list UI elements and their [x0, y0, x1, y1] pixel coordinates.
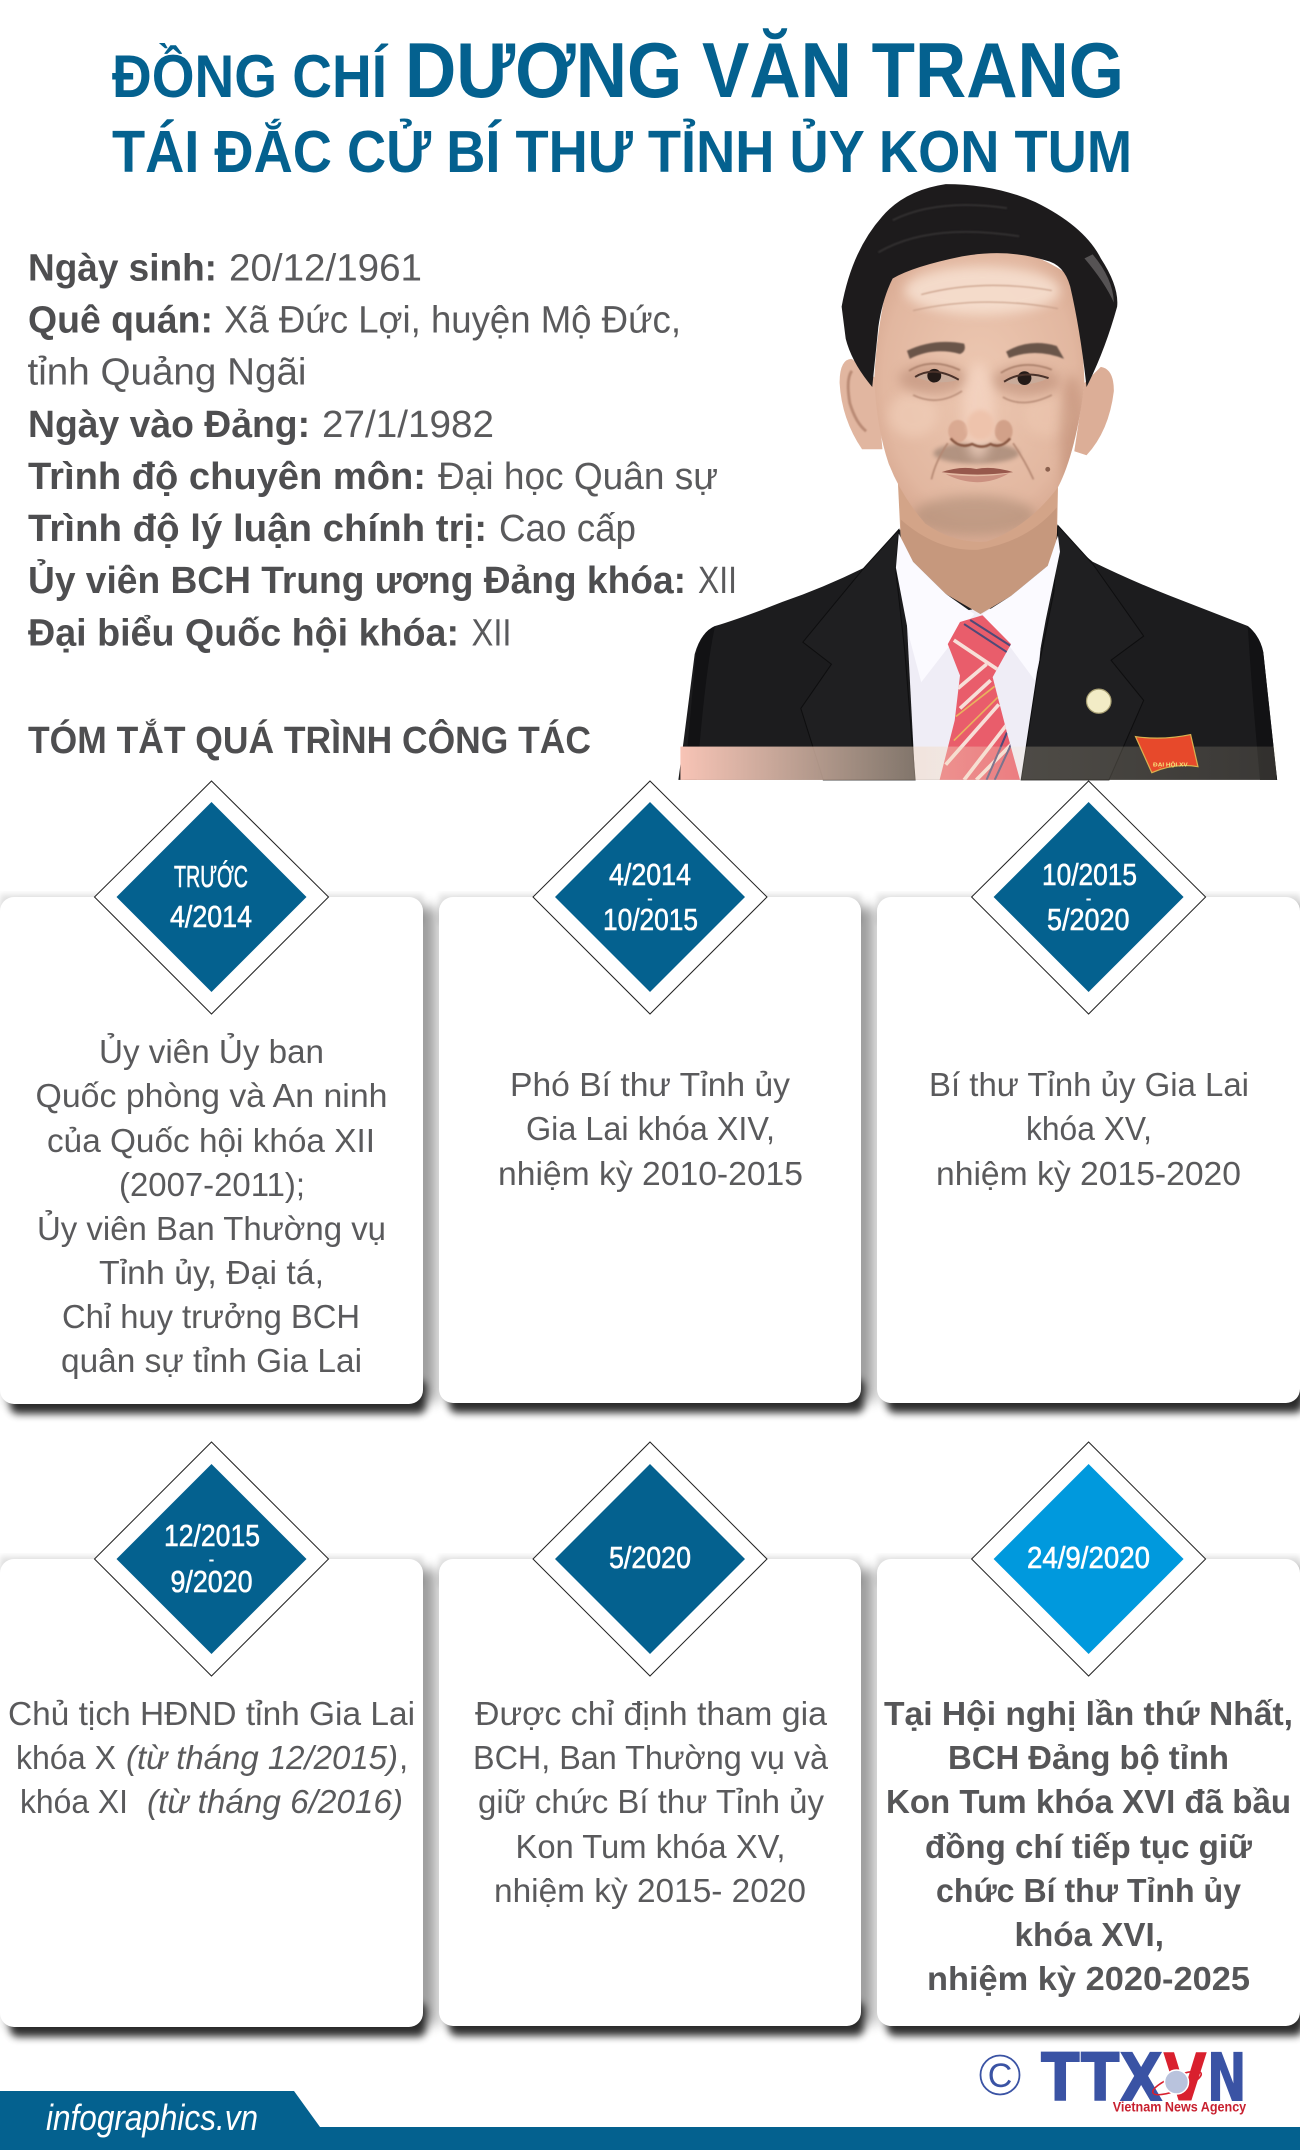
copyright mark [980, 2056, 1020, 2095]
panel: 10/2015 - 5/2020 [877, 781, 1300, 1413]
party join date: 27/1/1982 [322, 404, 494, 446]
party join date [28, 404, 494, 446]
red flag badge [1136, 735, 1198, 773]
description: Gia Lai khóa XIV, [526, 1110, 775, 1147]
nose [931, 410, 1033, 479]
date diamond [94, 781, 328, 1014]
description: nhiệm kỳ 2010-2015 [498, 1155, 803, 1192]
date diamond: 12/2015 [164, 1518, 260, 1553]
copyright mark: C [988, 2057, 1012, 2095]
political theory: Cao cấp [499, 508, 636, 550]
TTXVN wordmark: N [1207, 2040, 1246, 2116]
date diamond [972, 1442, 1206, 1676]
national assembly: XII [472, 612, 512, 654]
lapel pin [1087, 689, 1111, 713]
description: khóa XVI, [1014, 1916, 1164, 1953]
description: nhiệm kỳ 2015-2020 [936, 1155, 1241, 1192]
date diamond [94, 1442, 328, 1676]
description: Được chỉ định tham gia [475, 1695, 828, 1732]
description: BCH, Ban Thường vụ và [473, 1739, 829, 1776]
education: Trình độ chuyên môn: [28, 456, 426, 498]
description: khóa X [16, 1739, 116, 1776]
personal information [28, 248, 737, 654]
panel: 4/2014 - 10/2015 [439, 781, 874, 1413]
TTXVN wordmark [1041, 2040, 1246, 2116]
face [874, 247, 1084, 542]
description: nhiệm kỳ 2015- 2020 [494, 1872, 806, 1909]
education: Đại học Quân sự [438, 456, 718, 498]
facial shading [905, 266, 1060, 315]
description: Tại Hội nghị lần thứ Nhất, [884, 1695, 1293, 1732]
description: Kon Tum khóa XVI đã bầu [886, 1783, 1291, 1820]
panel: before 4/2014 [0, 781, 436, 1414]
description: Bí thư Tỉnh ủy Gia Lai [929, 1066, 1249, 1103]
description [884, 1695, 1293, 1997]
title line 2: TÁI ĐẮC CỬ BÍ THƯ TỈNH ỦY KON TUM [112, 118, 1132, 185]
date diamond: 4/2014 [170, 899, 252, 934]
description [929, 1066, 1249, 1192]
political theory: Trình độ lý luận chính trị: [28, 508, 487, 550]
shirt [907, 608, 1044, 780]
lapels [801, 530, 915, 780]
description: Kon Tum khóa XV, [516, 1828, 786, 1865]
date diamond: 5/2020 [1047, 902, 1130, 937]
description: BCH Đảng bộ tỉnh [948, 1739, 1229, 1776]
jacket [678, 526, 1277, 780]
description: khóa XV, [1026, 1110, 1152, 1147]
birth date: Ngày sinh: [28, 248, 217, 290]
date diamond: 4/2014 [609, 857, 691, 892]
panel: 24/9/2020 highlighted [877, 1442, 1300, 2036]
description: đồng chí tiếp tục giữ [925, 1828, 1252, 1865]
website: infographics.vn [46, 2097, 258, 2138]
description: Ủy viên Ban Thường vụ [37, 1210, 386, 1247]
description: Ủy viên Ủy ban [99, 1033, 324, 1070]
agency logo [980, 2040, 1246, 2116]
date diamond: TRƯỚC [174, 859, 248, 894]
central committee: XII [698, 560, 737, 602]
description: khóa XI [20, 1783, 128, 1820]
description: Phó Bí thư Tỉnh ủy [510, 1066, 791, 1103]
description: quân sự tỉnh Gia Lai [61, 1342, 362, 1379]
hometown: Xã Đức Lợi, huyện Mộ Đức, [224, 300, 681, 342]
hometown [28, 300, 681, 394]
title line 1 small: ĐỒNG CHÍ [112, 43, 388, 110]
national assembly: Đại biểu Quốc hội khóa: [28, 612, 459, 654]
eyebrows [907, 342, 965, 359]
description: giữ chức Bí thư Tỉnh ủy [478, 1783, 824, 1820]
date diamond [533, 1442, 767, 1676]
description [498, 1066, 803, 1192]
description [473, 1695, 829, 1909]
date diamond [533, 781, 767, 1014]
description: (2007-2011); [119, 1166, 305, 1203]
description: nhiệm kỳ 2020-2025 [927, 1960, 1250, 1997]
collar [896, 534, 974, 682]
birth date [28, 248, 422, 290]
date diamond: 24/9/2020 [1027, 1540, 1150, 1575]
description: (từ tháng 12/2015) [126, 1739, 398, 1776]
TTXVN wordmark: TTX [1041, 2040, 1163, 2116]
mole [1045, 467, 1050, 472]
hometown: Quê quán: [28, 300, 213, 342]
description [8, 1695, 415, 1820]
date diamond: 10/2015 [603, 902, 698, 937]
translucent band [680, 747, 1276, 780]
description: (từ tháng 6/2016) [147, 1783, 403, 1820]
eyes [909, 364, 1052, 403]
date diamond: - [209, 1550, 214, 1569]
date diamond: 5/2020 [609, 1540, 691, 1575]
birth date: 20/12/1961 [229, 248, 422, 290]
TTXVN wordmark: V [1163, 2040, 1207, 2116]
description: Chỉ huy trưởng BCH [62, 1298, 360, 1335]
description: của Quốc hội khóa XII [47, 1122, 375, 1159]
title line 1 name: DƯƠNG VĂN TRANG [405, 26, 1124, 114]
globe [1150, 2067, 1204, 2099]
description: Quốc phòng và An ninh [36, 1077, 388, 1114]
red flag badge: ĐẠI HỘI XV [1153, 760, 1188, 768]
footer band [0, 2091, 1300, 2150]
date diamond [972, 781, 1206, 1014]
description [36, 1033, 388, 1379]
description: , [399, 1739, 408, 1776]
necktie [938, 612, 1023, 781]
portrait photo illustration [678, 184, 1277, 781]
agency tagline: Vietnam News Agency [1113, 2098, 1246, 2114]
section heading: TÓM TẮT QUÁ TRÌNH CÔNG TÁC [28, 717, 591, 762]
hair [842, 184, 1117, 387]
description: chức Bí thư Tỉnh ủy [936, 1872, 1242, 1909]
date diamond: - [647, 889, 653, 908]
panel: 5/2020 [439, 1442, 874, 2036]
description: Tỉnh ủy, Đại tá, [99, 1254, 324, 1291]
central committee: Ủy viên BCH Trung ương Đảng khóa: [28, 558, 686, 602]
date diamond: 10/2015 [1042, 857, 1137, 892]
description: Chủ tịch HĐND tỉnh Gia Lai [8, 1695, 415, 1732]
mouth [942, 468, 1013, 482]
panel: 12/2015 - 9/2020 [0, 1442, 436, 2037]
education [28, 456, 718, 498]
party join date: Ngày vào Đảng: [28, 404, 310, 446]
ears [840, 359, 882, 449]
date diamond: 9/2020 [170, 1564, 252, 1599]
hometown: tỉnh Quảng Ngãi [28, 352, 307, 394]
date diamond: - [1086, 889, 1091, 908]
title [112, 26, 1132, 185]
neck [898, 483, 1058, 614]
